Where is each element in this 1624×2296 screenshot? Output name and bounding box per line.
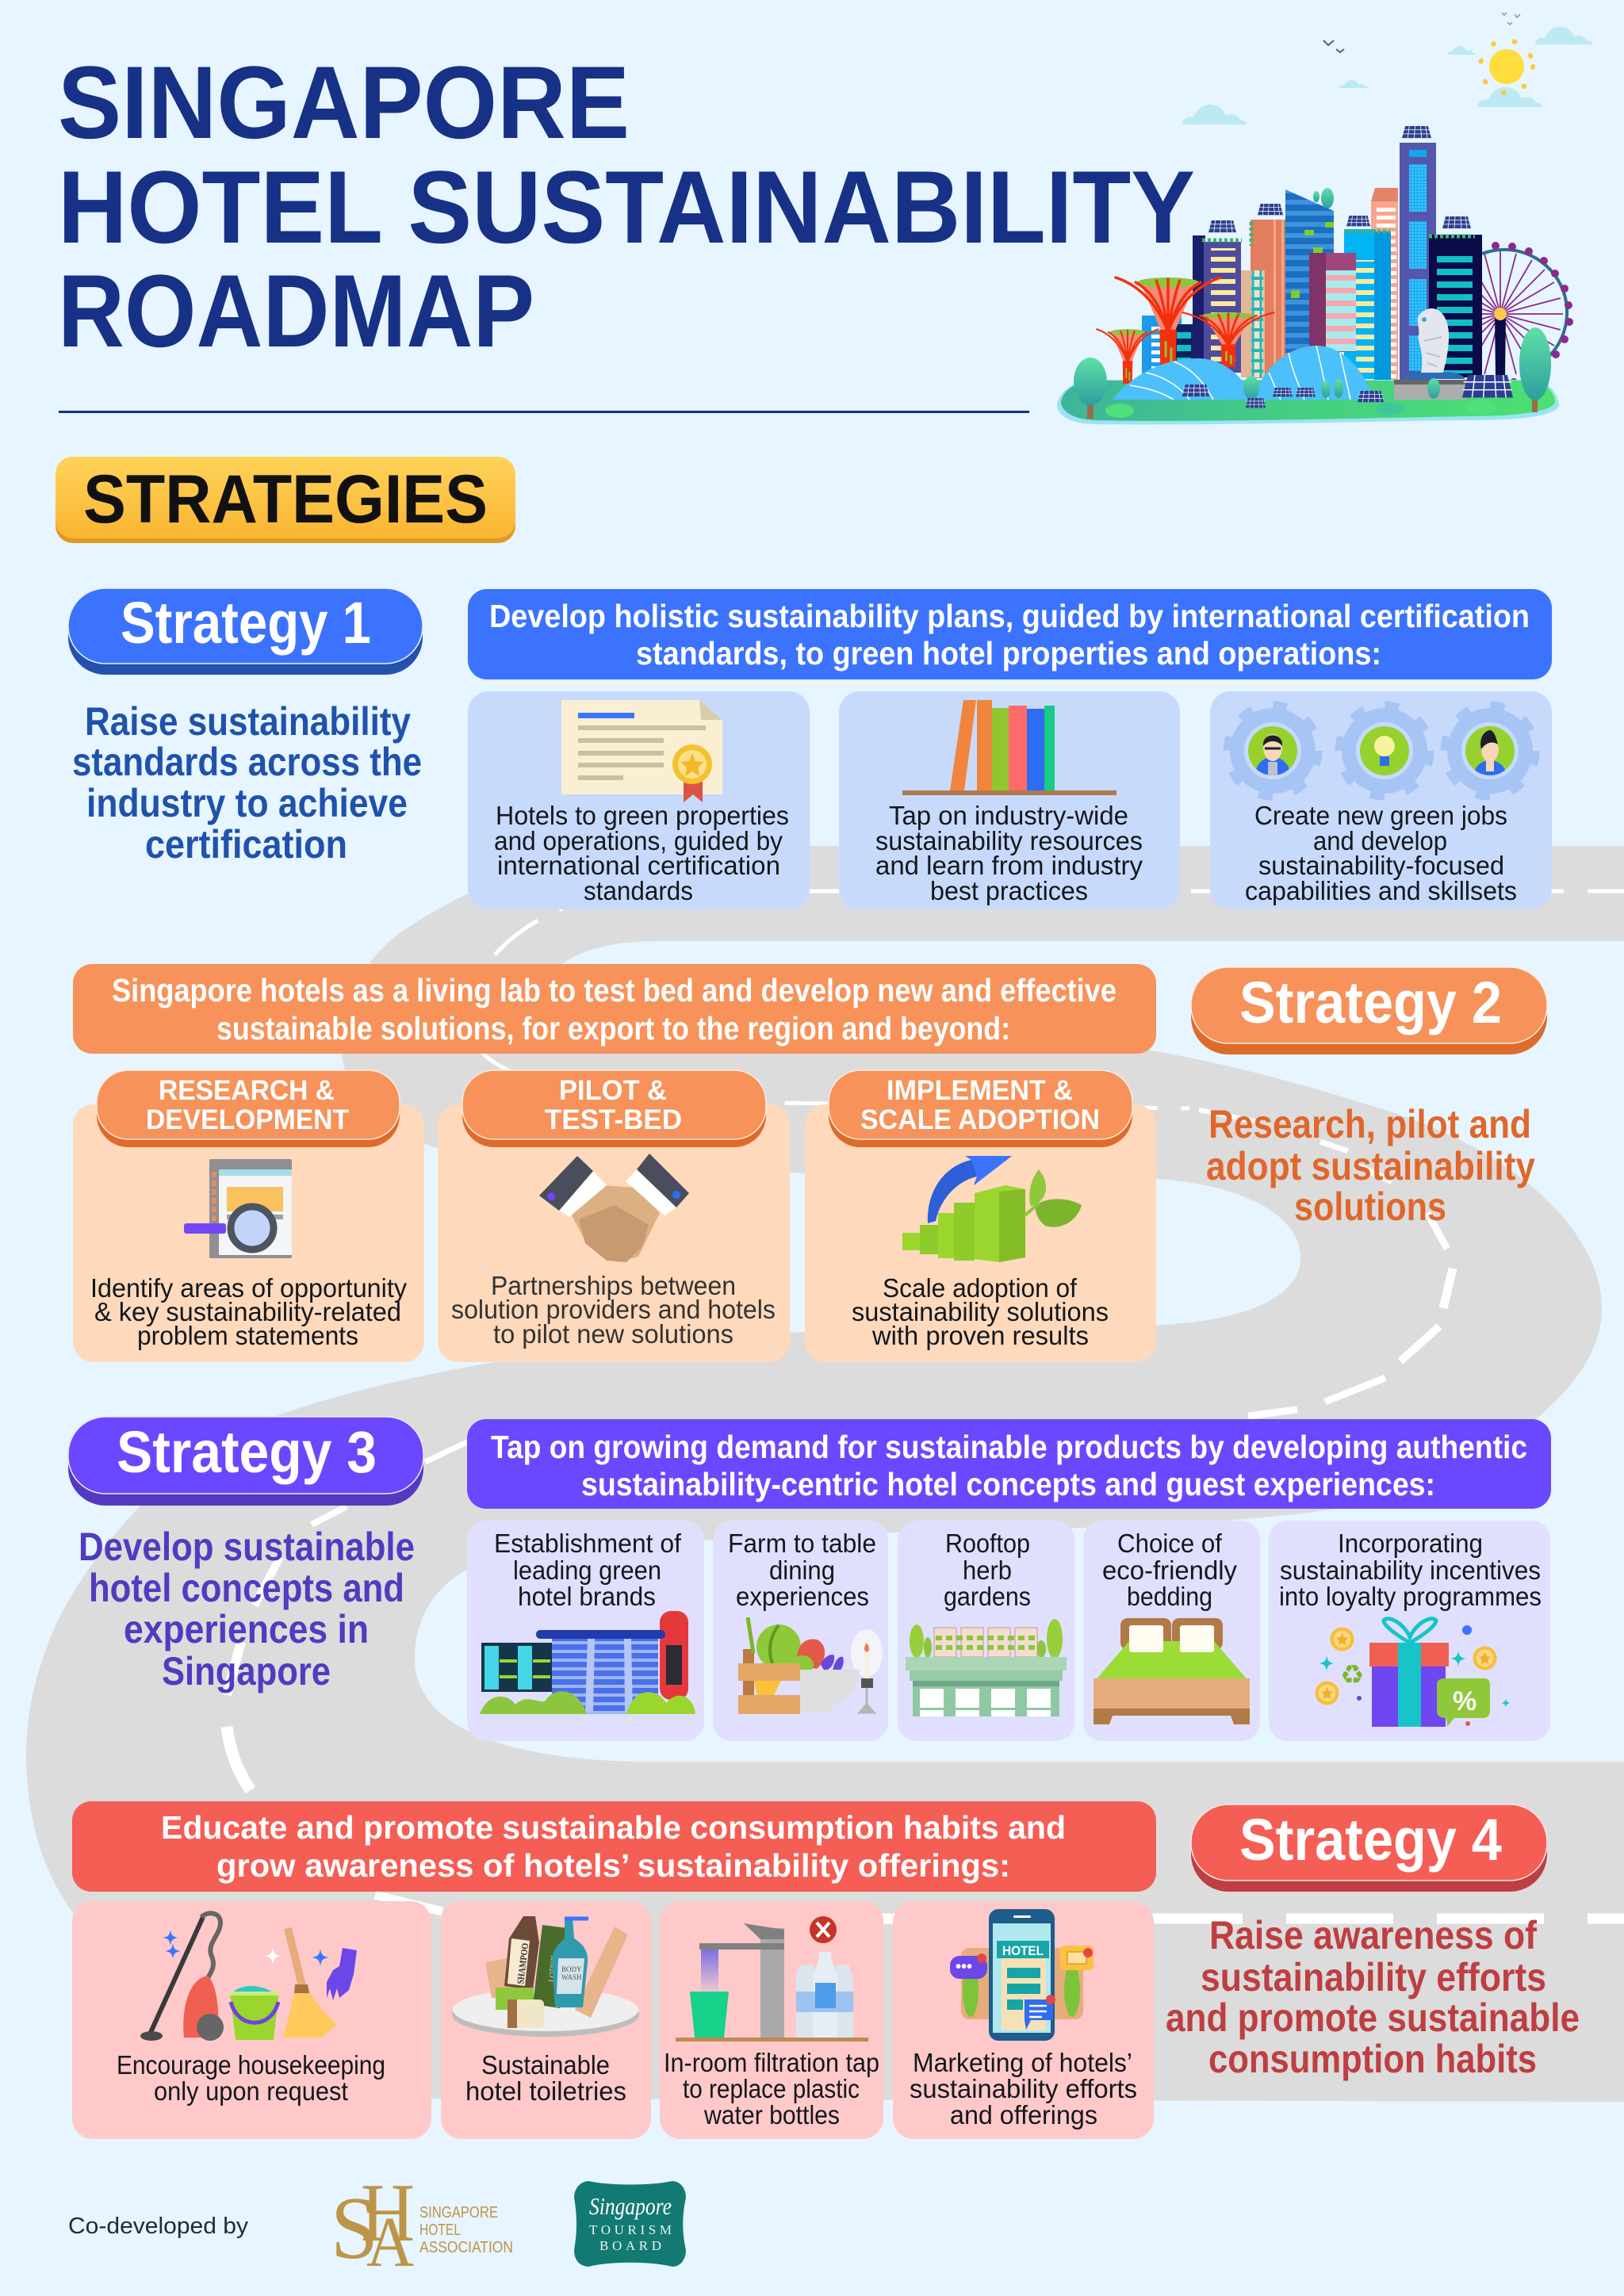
card: implement and scale adoption: with proven results [871, 1321, 1089, 1350]
card: filtration tap: In-room filtration tap [664, 2048, 879, 2077]
text: strategy 4 goal: consumption habits [1208, 2037, 1537, 2081]
logo: Singapore Tourism Board: BOARD [599, 2238, 661, 2253]
banner: strategy 3: Tap on growing demand for sustainable products by developing authentic [491, 1429, 1527, 1465]
heading: strategies button: STRATEGIES [83, 461, 488, 538]
card: industry resources: sustainability resources [875, 826, 1143, 855]
badge: strategy 1: Strategy 1 [121, 590, 371, 656]
card: farm to table: dining [769, 1556, 835, 1585]
icon: browser window with magnifier [184, 1159, 292, 1258]
banner: strategy 2: Singapore hotels as a living lab to test bed and develop new and effective [112, 972, 1116, 1008]
text: strategy 3 goal: hotel concepts and [89, 1566, 404, 1610]
card: green hotel brands [467, 1521, 704, 1741]
card: rooftop gardens: Rooftop [945, 1529, 1030, 1558]
card: green properties: international certification [497, 851, 780, 880]
icon: handshake [539, 1154, 689, 1262]
icon: certificate [561, 700, 722, 802]
card: industry resources: best practices [930, 876, 1088, 905]
card: green jobs: and develop [1313, 826, 1447, 855]
card: research and development: problem statements [137, 1321, 358, 1350]
card: farm to table: Farm to table [728, 1529, 876, 1558]
card: filtration tap: water bottles [703, 2100, 840, 2130]
card: green properties: and operations, guided by [494, 826, 783, 855]
panel: strategy 1 [68, 588, 1552, 909]
card: green jobs: sustainability-focused [1258, 851, 1504, 880]
icon: island ground [1057, 380, 1559, 424]
icon: rooftop herb garden building [906, 1619, 1067, 1716]
card: implement and scale adoption: sustainability solutions [852, 1297, 1109, 1326]
text: strategy 2 goal: adopt sustainability [1206, 1144, 1535, 1188]
card: rooftop gardens: gardens [944, 1582, 1031, 1611]
icon: gears with people and bulb [1228, 706, 1535, 796]
icon: smartphone with hotel and message bubbles [950, 1909, 1094, 2041]
card: green hotel brands: Establishment of [494, 1529, 682, 1558]
card: green hotel brands: hotel brands [518, 1582, 656, 1611]
winding road [26, 846, 1624, 2102]
badge: strategy 2 [1191, 967, 1547, 1054]
card: industry resources: and learn from industry [875, 851, 1143, 880]
title: ROADMAP [58, 253, 534, 369]
icon: gift, coins and coupon: % [1453, 1686, 1477, 1716]
icon: hotel toiletries on a plate: LOTION [547, 1954, 557, 1982]
card: green jobs [1210, 691, 1552, 909]
card: eco-friendly bedding: bedding [1127, 1582, 1212, 1611]
icon: crate of vegetables, bowl and candle [738, 1617, 883, 1714]
panel: strategy 2 [73, 964, 1547, 1362]
building: navy and purple tower [1193, 220, 1242, 373]
text: strategy 2 goal: solutions [1294, 1184, 1446, 1229]
card: filtration tap: to replace plastic [683, 2074, 860, 2103]
badge: strategy 4: Strategy 4 [1239, 1807, 1502, 1873]
logo: Singapore Hotel Association: H [361, 2166, 415, 2259]
card: green hotel brands: leading green [513, 1556, 661, 1585]
banner: strategy 1 [468, 589, 1552, 679]
building: blue angular tower [1285, 188, 1334, 353]
logo: Singapore Hotel Association: HOTEL [419, 2221, 461, 2239]
card: loyalty programmes: into loyalty programmes [1279, 1582, 1542, 1611]
banner: strategy 3: sustainability-centric hotel concepts and guest experiences: [581, 1466, 1435, 1502]
card: green properties: Hotels to green properties [496, 801, 789, 830]
card: rooftop gardens [898, 1521, 1074, 1741]
icon: books on shelf [902, 700, 1116, 795]
tab: pilot and test-bed: TEST-BED [545, 1104, 682, 1135]
card: research and development: & key sustainability-related [94, 1297, 401, 1326]
text: strategy 3 goal: experiences in [124, 1607, 369, 1651]
icon: smartphone with hotel and message bubbles: HOTEL [1002, 1943, 1044, 1958]
building: salmon tower [1251, 204, 1290, 378]
building: tallest purple tower [1400, 126, 1436, 381]
icon: solar panels [1182, 375, 1513, 408]
icon: bed [1094, 1618, 1250, 1724]
card: marketing: sustainability efforts [910, 2074, 1137, 2103]
tab: research and development [97, 1070, 400, 1147]
card: marketing [893, 1901, 1154, 2139]
building: tan block [1241, 270, 1265, 377]
building: dark navy tower [1429, 216, 1482, 377]
tab: implement and scale adoption: SCALE ADOPTION [860, 1104, 1100, 1135]
card: green jobs: capabilities and skillsets [1245, 876, 1517, 905]
text: strategy 1 goal: standards across the [72, 740, 422, 784]
card: implement and scale adoption: Scale adoption of [883, 1273, 1078, 1303]
card: industry resources: Tap on industry-wide [889, 801, 1128, 830]
icon: hotel toiletries on a plate: SHAMPOO [515, 1942, 530, 1984]
icon: vacuum, bucket, broom and glove [140, 1913, 357, 2041]
text: strategy 4 goal: sustainability efforts [1201, 1955, 1546, 1999]
card: toiletries: Sustainable [481, 2050, 610, 2080]
tab: implement and scale adoption: IMPLEMENT & [887, 1075, 1073, 1106]
card: green jobs: Create new green jobs [1254, 801, 1507, 830]
card: implement and scale adoption [805, 1070, 1156, 1362]
card: pilot and test-bed: solution providers and hotels [451, 1295, 776, 1324]
logo: Singapore Hotel Association: S [331, 2179, 378, 2278]
card: green properties [468, 691, 810, 909]
text: strategy 1 goal: certification [145, 822, 347, 867]
logo: Singapore Hotel Association [331, 2166, 513, 2282]
card: loyalty programmes: sustainability incentives [1280, 1556, 1541, 1585]
text: strategy 2 goal: Research, pilot and [1208, 1102, 1531, 1146]
card: farm to table [713, 1521, 888, 1741]
card: research and development: Identify areas of opportunity [90, 1273, 407, 1303]
card: pilot and test-bed: to pilot new solutions [493, 1319, 733, 1349]
card: filtration tap [660, 1901, 883, 2139]
logo: Singapore Hotel Association: SINGAPORE [419, 2204, 498, 2221]
card: toiletries: hotel toiletries [465, 2076, 626, 2106]
logo: Singapore Tourism Board: Singapore [589, 2192, 672, 2220]
icon: ferris wheel [1438, 242, 1573, 386]
tab: pilot and test-bed: PILOT & [559, 1075, 667, 1106]
icon: gift, coins and coupon [1315, 1619, 1511, 1727]
card: eco-friendly bedding: Choice of [1117, 1529, 1223, 1558]
logo: Singapore Tourism Board [574, 2181, 686, 2267]
icon: hotel toiletries on a plate: WASH [561, 1973, 582, 1981]
card: eco-friendly bedding [1083, 1521, 1260, 1741]
card: marketing: Marketing of hotels’ [913, 2048, 1132, 2077]
text: strategy 3 goal: Singapore [162, 1649, 331, 1693]
text: strategy 4 goal [1166, 1913, 1580, 2081]
logo: Singapore Hotel Association: A [366, 2203, 414, 2282]
banner: strategy 4 [72, 1801, 1156, 1892]
card: research and development [73, 1070, 424, 1362]
icon: gift, coins and coupon: ♻ [1340, 1660, 1364, 1690]
card: industry resources [839, 691, 1180, 909]
card: pilot and test-bed [438, 1070, 790, 1362]
icon: Merlion statue [1394, 308, 1466, 400]
icon: growth bars, arrow and leaves [902, 1156, 1082, 1262]
title underline [59, 411, 1029, 413]
icon: trees [1074, 327, 1551, 419]
banner: strategy 3 [467, 1419, 1551, 1509]
card: housekeeping: only upon request [154, 2076, 348, 2106]
banner: strategy 1: standards, to green hotel properties and operations: [636, 635, 1381, 672]
badge: strategy 4 [1191, 1804, 1547, 1892]
title: SINGAPORE [58, 44, 630, 160]
icon: filtration tap, glass and bottles [676, 1916, 868, 2042]
badge: strategy 2: Strategy 2 [1239, 970, 1502, 1035]
tab: research and development: DEVELOPMENT [146, 1104, 349, 1135]
panel: strategy 3 [68, 1417, 1551, 1741]
building: salmon tall [1371, 188, 1398, 396]
banner: strategy 2: sustainable solutions, for export to the region and beyond: [216, 1010, 1010, 1047]
illustration: Singapore skyline [1057, 13, 1592, 424]
banner: strategy 4: Educate and promote sustainable consumption habits and [161, 1809, 1066, 1846]
banner: strategy 2 [73, 964, 1156, 1054]
text: strategy 3 goal: Develop sustainable [79, 1525, 415, 1569]
building: cyan block [1344, 216, 1391, 396]
tab: implement and scale adoption [829, 1070, 1132, 1147]
text: strategy 4 goal: and promote sustainable [1166, 1996, 1580, 2040]
card: toiletries [441, 1901, 651, 2139]
card: rooftop gardens: herb [963, 1556, 1012, 1585]
text: strategy 4 goal: Raise awareness of [1209, 1913, 1537, 1957]
banner: strategy 1: Develop holistic sustainability plans, guided by international certification [489, 598, 1530, 634]
icon: green hotel buildings [480, 1611, 695, 1714]
card: eco-friendly bedding: eco-friendly [1102, 1556, 1237, 1585]
card: green properties: standards [584, 876, 693, 905]
card: loyalty programmes [1269, 1521, 1550, 1741]
text: strategy 1 goal: Raise sustainability [85, 699, 411, 744]
card: housekeeping: Encourage housekeeping [117, 2050, 385, 2080]
tab: pilot and test-bed [462, 1070, 766, 1147]
icon: sun [1480, 40, 1533, 93]
logo: Singapore Tourism Board: TOURISM [589, 2222, 672, 2237]
badge: strategy 3: Strategy 3 [117, 1419, 377, 1485]
card: housekeeping [72, 1901, 431, 2139]
text: strategy 1 goal: industry to achieve [86, 781, 408, 825]
icon: cloud domes [1113, 346, 1373, 400]
icon: supertrees [1097, 277, 1274, 384]
title: HOTEL SUSTAINABILITY [58, 149, 1195, 265]
text: strategy 3 goal [79, 1525, 415, 1693]
banner: strategy 4: grow awareness of hotels’ sustainability offerings: [216, 1847, 1010, 1884]
building: magenta block [1309, 253, 1356, 352]
logo: Singapore Hotel Association: ASSOCIATION [419, 2239, 513, 2256]
text: strategy 1 goal [72, 699, 422, 867]
tab: research and development: RESEARCH & [159, 1075, 335, 1106]
footer: co-developed by: Co-developed by [68, 2214, 249, 2239]
badge: strategy 1 [68, 588, 423, 675]
panel: strategy 4 [72, 1801, 1580, 2139]
icon: clouds [1182, 26, 1592, 124]
card: marketing: and offerings [950, 2100, 1097, 2130]
text: strategy 2 goal [1206, 1102, 1535, 1229]
icon: hotel toiletries on a plate: BODY [561, 1965, 582, 1973]
card: pilot and test-bed: Partnerships between [491, 1271, 736, 1300]
icon: birds [1323, 13, 1520, 52]
icon: hotel toiletries on a plate [452, 1916, 639, 2037]
building: left small blue [1142, 316, 1193, 383]
card: loyalty programmes: Incorporating [1338, 1529, 1483, 1558]
card: farm to table: experiences [736, 1582, 869, 1611]
badge: strategy 3 [68, 1417, 423, 1506]
icon: smartphone with hotel and message bubbles: ••• [956, 1958, 972, 1976]
title [58, 44, 1195, 369]
